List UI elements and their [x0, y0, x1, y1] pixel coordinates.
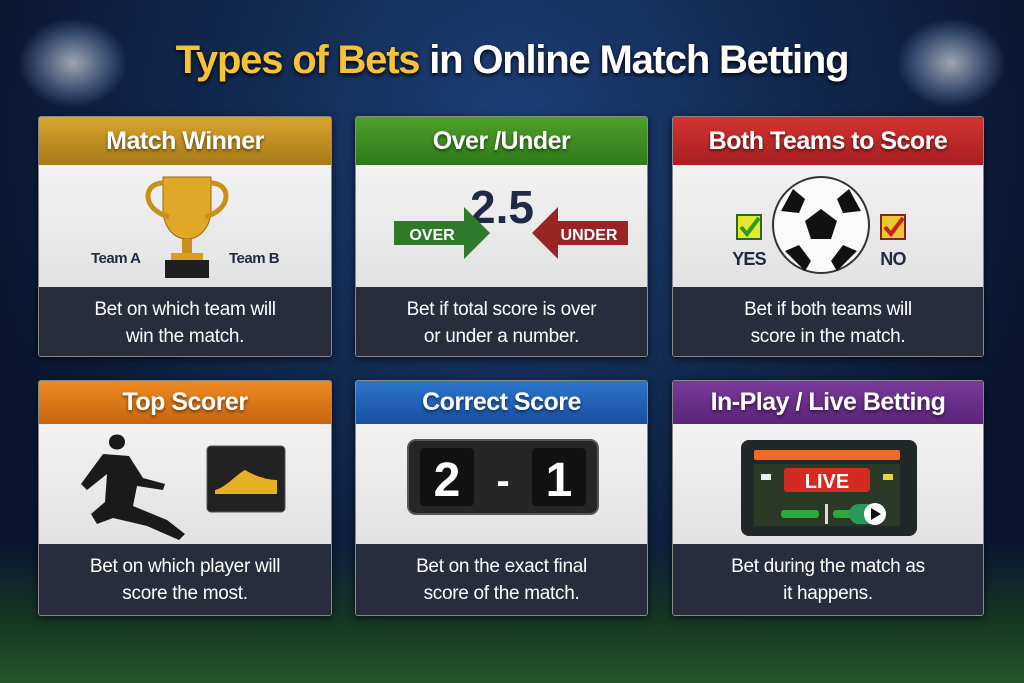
description: Bet on which player will	[90, 556, 280, 577]
illustration: scoreboard	[356, 424, 647, 544]
illustration: live tablet	[673, 424, 983, 544]
description	[39, 287, 331, 358]
illustration: 2.5 arrows: 2.5	[470, 181, 534, 233]
illustration: player and boot	[39, 424, 331, 544]
illustration: scoreboard: 1	[546, 454, 572, 507]
illustration: scoreboard: 2	[434, 454, 460, 507]
heading: Top Scorer	[122, 388, 248, 416]
illustration: trophy	[39, 165, 331, 287]
panel: top scorer	[38, 380, 332, 616]
title: Types of Bets in Online Match Betting	[176, 38, 848, 82]
illustration: ball yes no: NO	[880, 249, 906, 269]
panel: both teams to score	[672, 116, 984, 357]
illustration: scoreboard: -	[496, 459, 510, 503]
description: Bet on the exact final	[416, 556, 587, 577]
illustration: 2.5 arrows: OVER	[409, 227, 455, 244]
description: Bet if both teams will	[744, 299, 912, 320]
description: it happens.	[783, 583, 873, 604]
heading: Match Winner	[106, 127, 264, 155]
description: Bet during the match as	[731, 556, 925, 577]
heading: Over /Under	[433, 127, 570, 155]
description: Bet if total score is over	[407, 299, 596, 320]
panel: match winner	[38, 116, 332, 357]
description	[39, 544, 331, 617]
description: Bet on which team will	[94, 299, 276, 320]
panel: in-play live betting	[672, 380, 984, 616]
description	[673, 287, 983, 358]
heading	[356, 381, 647, 424]
heading	[673, 381, 983, 424]
illustration: trophy: Team A	[91, 250, 141, 267]
description: score of the match.	[424, 583, 579, 604]
description: or under a number.	[424, 326, 579, 347]
description: win the match.	[126, 326, 244, 347]
description: score the most.	[122, 583, 248, 604]
heading: Correct Score	[422, 388, 581, 416]
heading: In-Play / Live Betting	[711, 388, 945, 416]
heading	[673, 117, 983, 165]
illustration: trophy: Team B	[229, 250, 280, 267]
description: score in the match.	[751, 326, 905, 347]
illustration: 2.5 arrows: UNDER	[561, 227, 618, 244]
stadium lights right	[896, 18, 1006, 108]
heading	[356, 117, 647, 165]
description	[356, 544, 647, 617]
heading: Both Teams to Score	[709, 127, 947, 155]
panel: correct score	[355, 380, 648, 616]
stadium lights left	[18, 18, 128, 108]
heading	[39, 117, 331, 165]
heading	[39, 381, 331, 424]
illustration: live tablet: LIVE	[805, 471, 849, 493]
description	[673, 544, 983, 617]
description	[356, 287, 647, 358]
illustration: ball yes no: YES	[732, 249, 767, 269]
panel: over/under	[355, 116, 648, 357]
illustration: 2.5 arrows	[356, 165, 647, 287]
illustration: ball yes no	[673, 165, 983, 287]
